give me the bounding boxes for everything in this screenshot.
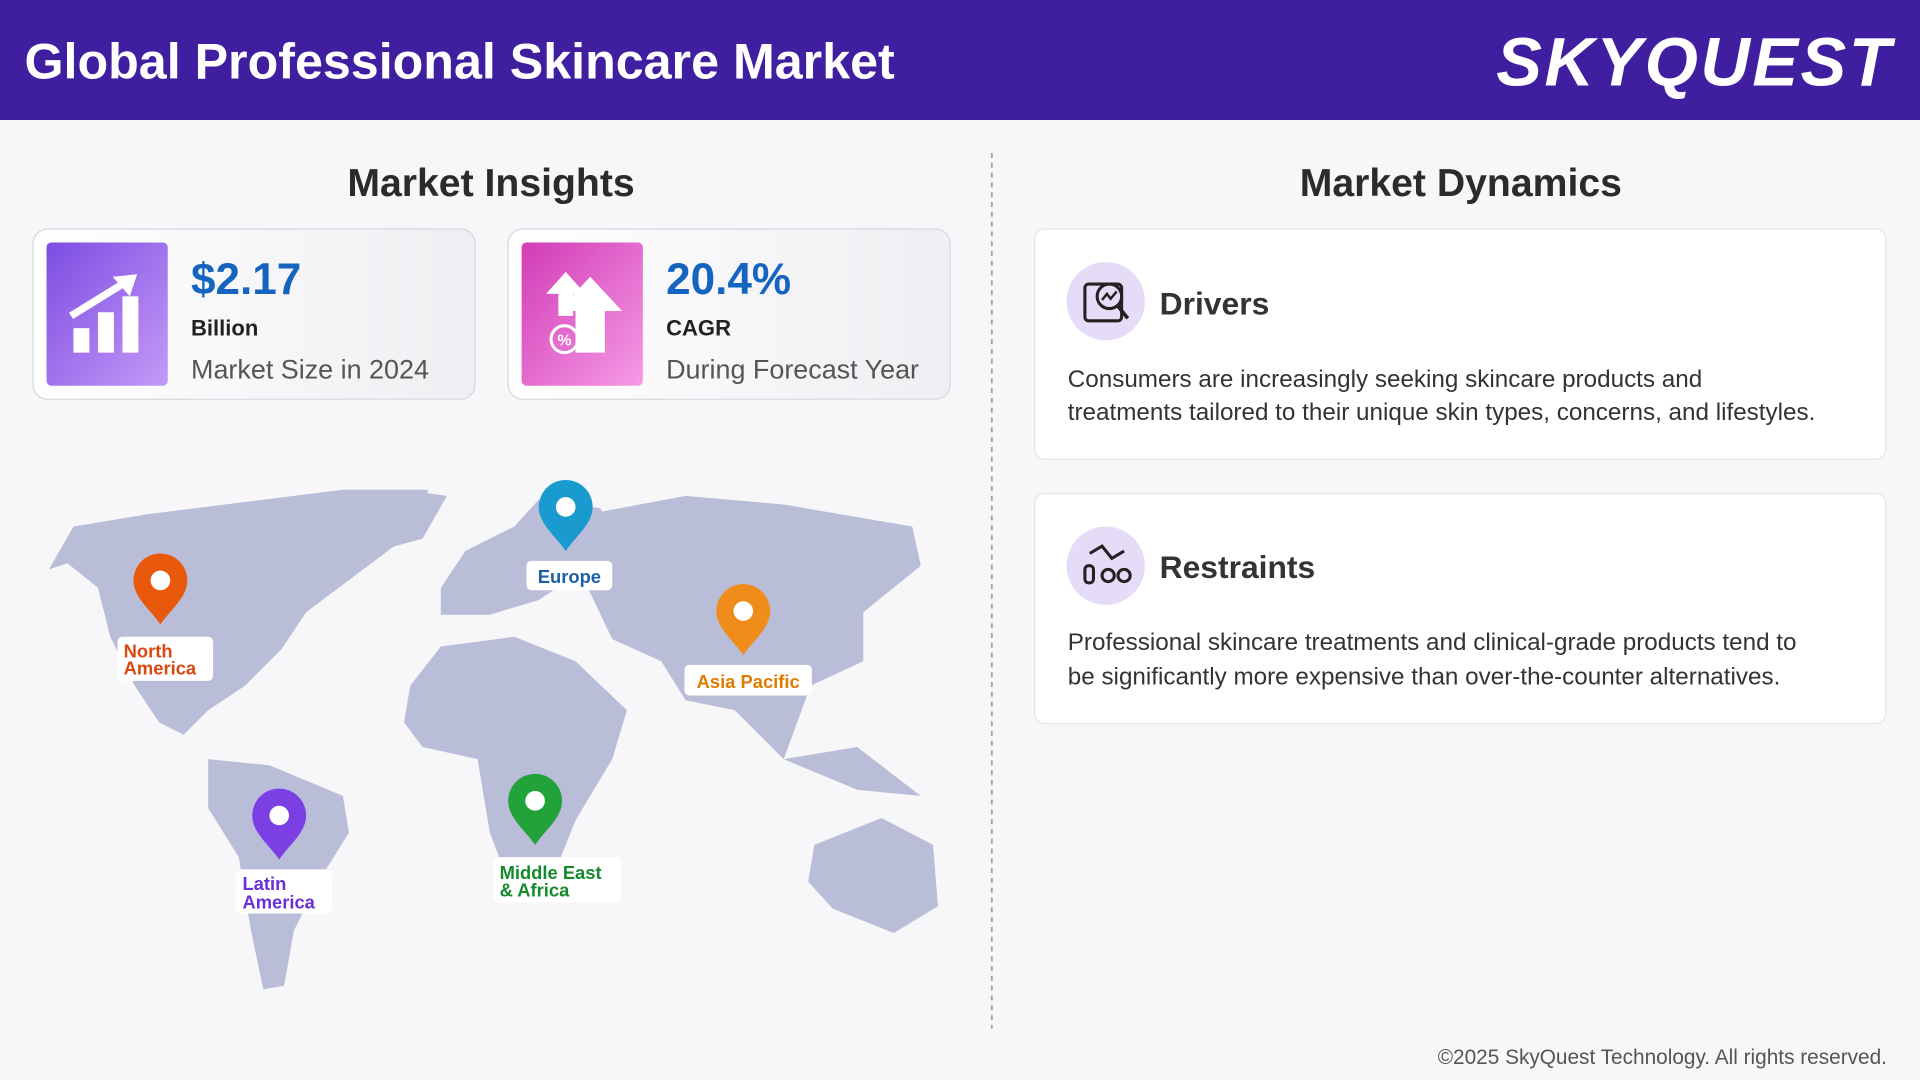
header bar (0, 0, 1920, 120)
pin: Latin America (236, 789, 332, 913)
panel: restraints: Professional skincare treatments and clinical-grade products tend to (1068, 629, 1797, 656)
card: market size: Billion (191, 316, 258, 341)
pin: Middle East & Africa: Middle East (500, 862, 602, 883)
panel: restraints: be significantly more expensive than over-the-counter alternatives. (1068, 663, 1780, 690)
panel: drivers: Consumers are increasingly seeking skincare products and (1068, 366, 1702, 393)
card: market size (33, 229, 475, 399)
panel: drivers: treatments tailored to their unique skin types, concerns, and lifestyles. (1068, 399, 1815, 426)
pin: North America (118, 553, 213, 681)
panel: drivers: Drivers (1160, 286, 1269, 322)
card: market size: $2.17 (191, 255, 301, 304)
icon: arrows percent: % (557, 332, 572, 349)
panel: restraints: Restraints (1160, 549, 1315, 585)
pin: Latin America: America (242, 892, 316, 913)
title: Global Professional Skincare Market (24, 33, 895, 89)
pin: Middle East & Africa (493, 774, 621, 902)
card: CAGR: 20.4% (666, 255, 791, 304)
icon: bar chart (47, 242, 168, 386)
pin: North America: North (124, 641, 173, 662)
pin: Middle East & Africa: & Africa (500, 879, 570, 900)
logo: SKYQUEST (1496, 24, 1896, 101)
card: CAGR: CAGR (666, 316, 731, 341)
pin: Asia Pacific: Asia Pacific (697, 671, 800, 692)
pin: Europe (527, 480, 612, 590)
panel: drivers (1035, 229, 1886, 459)
heading: market dynamics: Market Dynamics (1300, 162, 1622, 205)
pin: Europe: Europe (538, 566, 601, 587)
card: CAGR: During Forecast Year (666, 354, 919, 384)
icon: drivers (1067, 262, 1145, 340)
pin: Asia Pacific (684, 584, 812, 696)
pin: Latin America: Latin (242, 873, 286, 894)
pin: North America: America (124, 658, 197, 679)
panel: restraints (1035, 493, 1886, 724)
footer: ©2025 SkyQuest Technology. All rights reserved. (1438, 1046, 1887, 1069)
icon: arrows percent (522, 242, 643, 386)
world map (49, 490, 938, 989)
icon: restraints (1067, 527, 1145, 605)
heading: market insights: Market Insights (347, 162, 635, 205)
card: CAGR (508, 229, 950, 399)
card: market size: Market Size in 2024 (191, 354, 429, 384)
